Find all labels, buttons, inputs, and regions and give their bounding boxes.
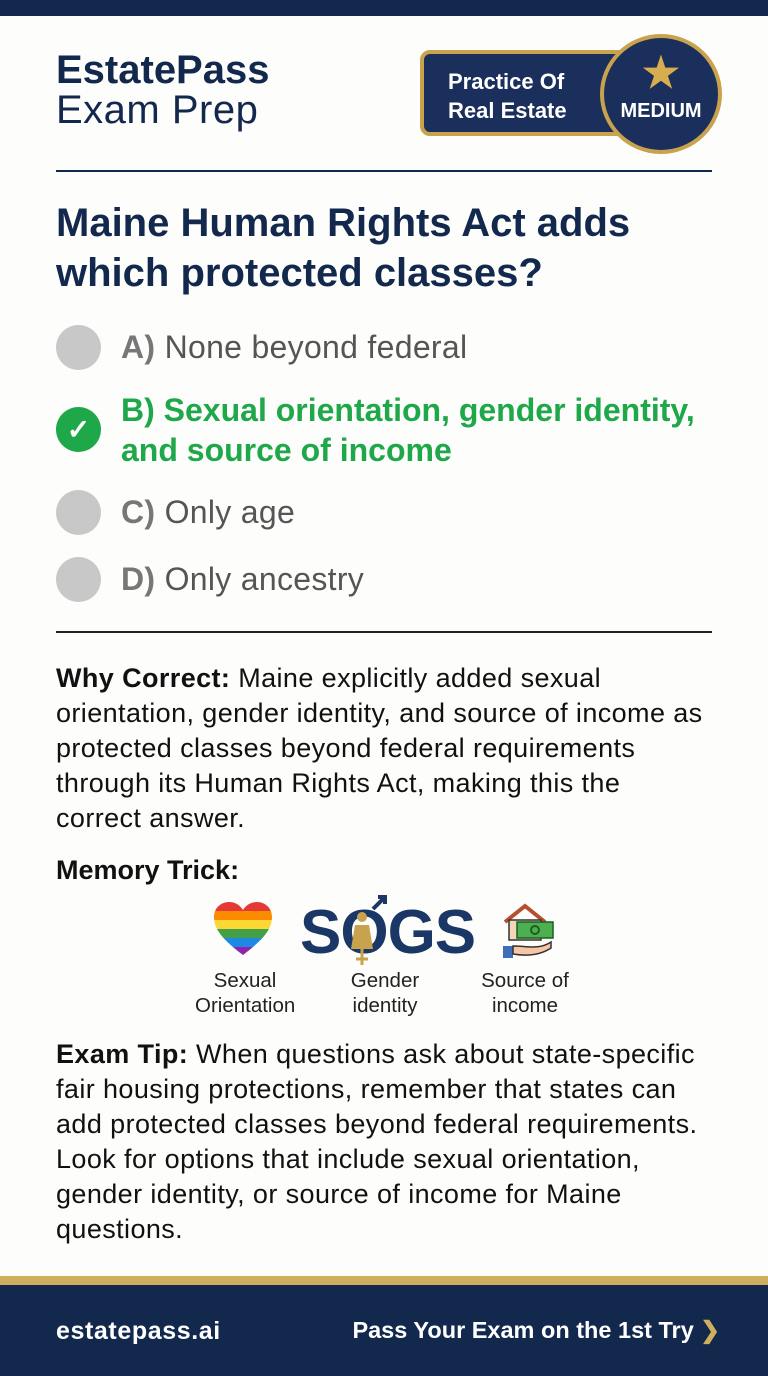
badge: difficulty: MEDIUM: [620, 100, 702, 122]
labels: Orientation: [195, 994, 295, 1017]
memory trick graphic: [195, 895, 569, 1017]
labels: [195, 969, 295, 1017]
why correct: correct answer.: [56, 803, 245, 833]
option C: C) Only age: [121, 494, 295, 530]
logo: Exam Prep: [56, 88, 258, 132]
why correct: orientation, gender identity, and source of income as: [56, 698, 703, 728]
question: Maine Human Rights Act adds: [56, 201, 630, 245]
option B correct: B) Sexual orientation, gender identity,: [121, 392, 695, 428]
icon: gender figure: [351, 895, 387, 965]
question: which protected classes?: [56, 251, 543, 295]
exam tip: [56, 1039, 697, 1244]
option C: [56, 490, 295, 535]
option D: D) Only ancestry: [121, 561, 364, 597]
exam tip: Exam Tip: When questions ask about state-specific: [56, 1039, 695, 1069]
badge: category: [420, 50, 635, 136]
option A: A) None beyond federal: [121, 329, 467, 365]
option B correct: and source of income: [121, 432, 452, 468]
footer: [0, 1276, 768, 1376]
why correct: Why Correct: Maine explicitly added sexual: [56, 663, 601, 693]
exam tip: questions.: [56, 1214, 183, 1244]
icon: house hand: [503, 904, 554, 958]
exam tip: Look for options that include sexual orientation,: [56, 1144, 640, 1174]
icon: rainbow heart: [214, 902, 272, 955]
why correct: [56, 663, 703, 833]
memory trick graphic: Gender: [351, 969, 419, 992]
memory trick graphic: income: [492, 994, 558, 1017]
badge: category: Real Estate: [448, 98, 567, 123]
exam tip: add protected classes beyond federal requirements.: [56, 1109, 697, 1139]
badge: category: Practice Of: [448, 69, 564, 94]
badge: [420, 34, 722, 154]
badge: difficulty: ★: [642, 49, 680, 96]
footer: Pass Your Exam on the 1st Try ❯: [352, 1317, 720, 1343]
exam tip: gender identity, or source of income for Maine: [56, 1179, 622, 1209]
logo: EstatePass: [56, 48, 269, 92]
why correct: through its Human Rights Act, making this the: [56, 768, 620, 798]
option A: [56, 325, 467, 370]
option B correct: ✓: [67, 414, 90, 445]
top bar: [0, 0, 768, 16]
exam tip: fair housing protections, remember that states can: [56, 1074, 676, 1104]
badge: difficulty: [600, 34, 722, 154]
footer: estatepass.ai: [56, 1317, 221, 1345]
memory trick graphic: Source of: [481, 969, 569, 992]
question: [56, 201, 630, 295]
labels: Sexual: [214, 969, 276, 992]
logo: [56, 48, 269, 132]
why correct: protected classes beyond federal requirements: [56, 733, 635, 763]
option D: [56, 557, 364, 602]
memory trick graphic: identity: [353, 994, 417, 1017]
text: SOGS: SOGS: [300, 898, 475, 967]
memory trick heading: Memory Trick:: [56, 855, 239, 885]
option B correct: [56, 392, 695, 468]
